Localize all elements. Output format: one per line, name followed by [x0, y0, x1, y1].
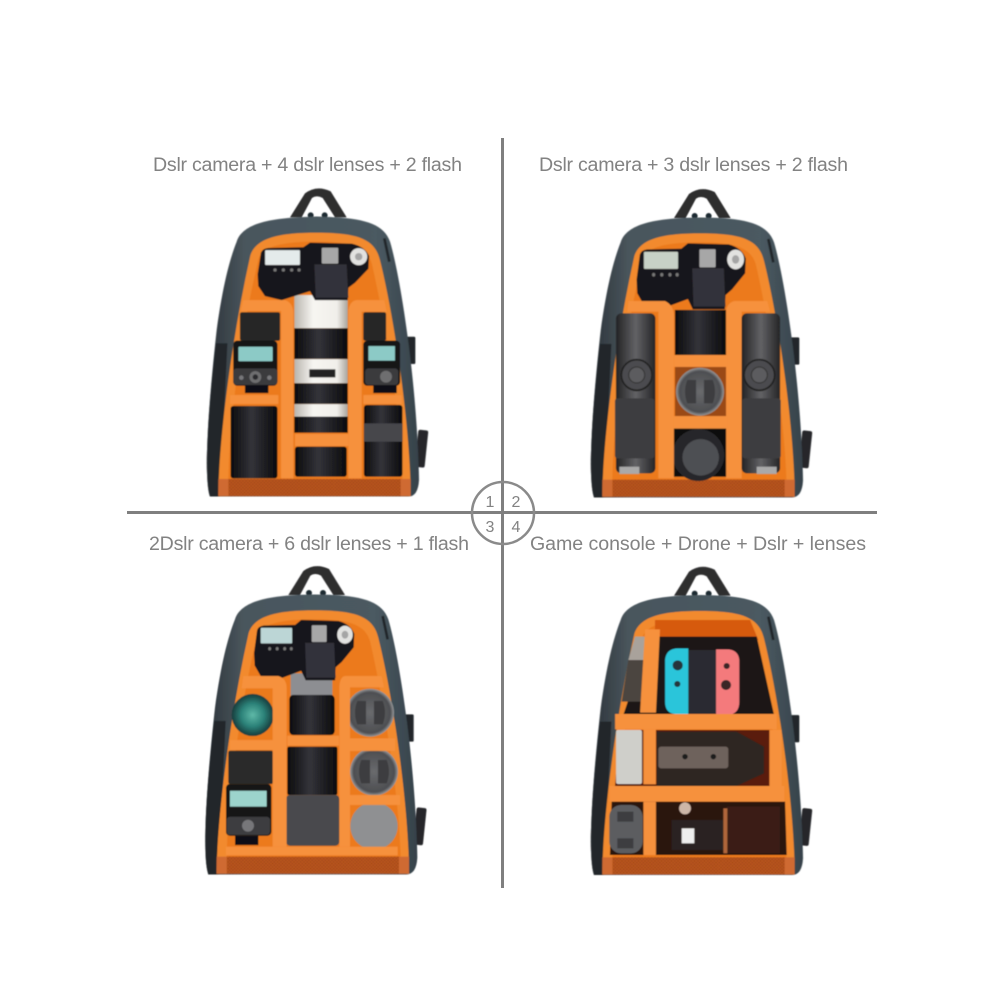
upper lens: [287, 747, 337, 795]
compartment dark backing: [610, 620, 787, 855]
caption: layout 1: Dslr camera + 4 dslr lenses + 2 flash: [153, 154, 462, 176]
flash left: [615, 313, 655, 474]
number badge: 1: [486, 494, 495, 511]
divider cross: [127, 138, 877, 888]
caption: layout 2: Dslr camera + 3 dslr lenses + 2 flash: [539, 154, 848, 176]
flash right: [363, 312, 400, 393]
panel: backpack 1: [207, 188, 428, 497]
centre lens: [295, 447, 347, 477]
flash right: [742, 313, 781, 474]
game console: [665, 648, 739, 715]
left lens: [231, 406, 277, 478]
lens cap 1: [346, 689, 394, 737]
dividers: [627, 301, 770, 478]
number badge: 4: [512, 519, 521, 536]
number badge: [472, 482, 534, 544]
caption: layout 3: 2Dslr camera + 6 dslr lenses + 1 flash: [149, 533, 469, 555]
right lens: [364, 405, 402, 477]
lens cap: [609, 805, 643, 853]
green lens: [232, 694, 274, 736]
camera: [258, 243, 369, 300]
panel: backpack 2: [591, 189, 812, 497]
white case: [616, 730, 642, 784]
lens cap 2: [350, 748, 398, 796]
dividers: [609, 629, 784, 855]
flash left: [233, 312, 280, 393]
flash: [226, 751, 273, 845]
lens cap: [676, 368, 724, 416]
panel: backpack 3: [205, 566, 427, 874]
cap compartment shade: [675, 367, 727, 417]
drone: [657, 732, 764, 786]
lens cap 3: [350, 802, 398, 850]
number badge: 3: [486, 519, 495, 536]
mounted lens: [675, 310, 726, 355]
camera: [254, 620, 354, 680]
dividers: [226, 676, 400, 855]
camera: [637, 243, 746, 309]
telephoto lens: [294, 295, 348, 433]
dividers: [230, 300, 402, 478]
panel: backpack 4: [591, 567, 812, 875]
lower lens: [286, 795, 339, 846]
number badge: 2: [512, 494, 521, 511]
mounted lens: [289, 673, 335, 735]
caption: layout 4: Game console + Drone + Dslr + lenses: [530, 533, 866, 555]
camera with lens: [672, 802, 780, 853]
bottom lens: [672, 428, 727, 481]
